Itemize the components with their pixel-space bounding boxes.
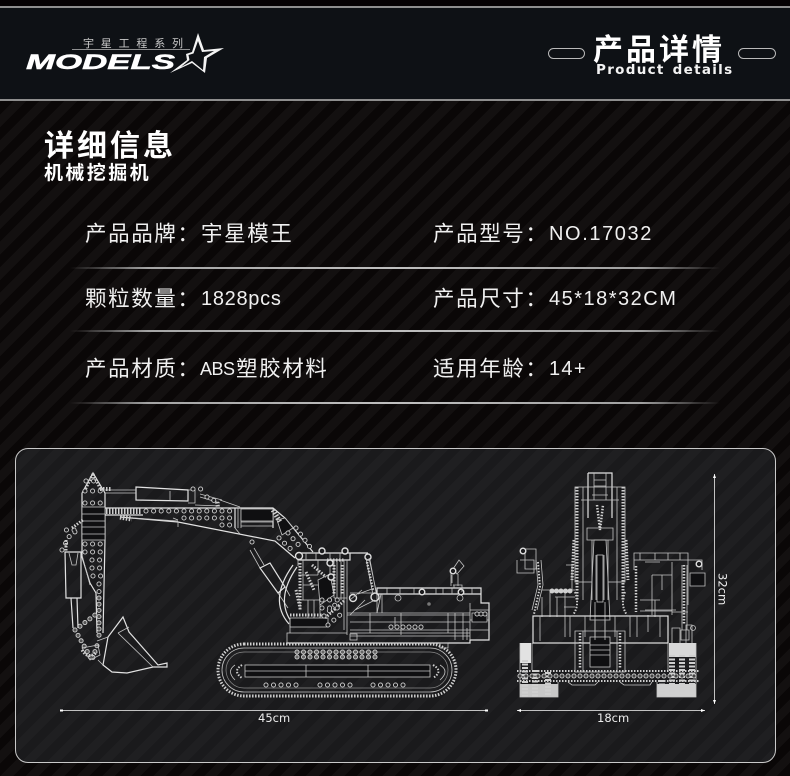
logo series caption: 宇星工程系列	[83, 35, 190, 51]
heading main: 详细信息	[44, 121, 176, 165]
left pill ornament	[548, 48, 585, 59]
header english subtitle: Product details	[596, 62, 733, 78]
section heading	[44, 121, 176, 185]
spec row 3: ABS	[200, 359, 235, 379]
rear house body	[287, 560, 489, 648]
front boom column	[572, 473, 628, 640]
header title: 产品详情	[593, 25, 725, 69]
dimension: height 32cm: 32cm	[716, 573, 730, 605]
spec row 1	[85, 217, 653, 248]
spec row 2	[85, 282, 677, 313]
crawler track	[218, 644, 456, 696]
boom	[105, 508, 313, 558]
front left cab block	[517, 548, 575, 617]
spec row 3: 适用年龄：	[433, 352, 549, 383]
front crawler tracks	[517, 643, 700, 697]
header title group	[548, 25, 776, 78]
top black bar	[0, 0, 790, 7]
logo wordmark: MODELS	[26, 51, 175, 74]
bucket	[97, 617, 167, 673]
logo rule	[72, 48, 190, 50]
logo star	[170, 33, 224, 73]
stick arm	[82, 473, 105, 633]
front body frame	[533, 616, 668, 672]
right pill ornament	[738, 48, 776, 59]
spec row 2: 产品尺寸：	[433, 282, 549, 313]
spec row 3: 塑胶材料	[236, 352, 328, 383]
front view excavator	[517, 473, 705, 697]
spec row 1: 产品型号：	[433, 217, 549, 248]
dimension: width 18cm	[517, 709, 705, 725]
spec row 3: 产品材质：	[85, 352, 201, 383]
stick cylinder	[62, 520, 90, 628]
header band	[0, 6, 790, 101]
spec row 1: 产品品牌：	[85, 217, 201, 248]
side view excavator	[62, 473, 489, 696]
boom cylinder	[250, 542, 297, 624]
spec row 1: NO.17032	[549, 223, 653, 245]
spec row 1: 宇星模王	[201, 217, 293, 248]
spec row 3: 14+	[549, 358, 587, 380]
dimension: length 45cm: 45cm	[258, 711, 290, 725]
heading sub: 机械挖掘机	[44, 158, 151, 185]
spec row 2: 1828pcs	[201, 288, 282, 310]
spec row 2: 45*18*32CM	[549, 288, 677, 310]
logo: Models star	[26, 33, 224, 74]
panel: dimensions drawing	[15, 448, 776, 763]
front right machinery	[634, 553, 705, 650]
spec row 2: 颗粒数量：	[85, 282, 201, 313]
dimension: width 18cm: 18cm	[597, 711, 629, 725]
spec row 3	[85, 352, 587, 383]
dimension: height 32cm	[713, 474, 730, 704]
dipper cylinder	[100, 487, 240, 508]
upper house machinery	[290, 548, 379, 635]
bucket linkage	[75, 598, 100, 660]
